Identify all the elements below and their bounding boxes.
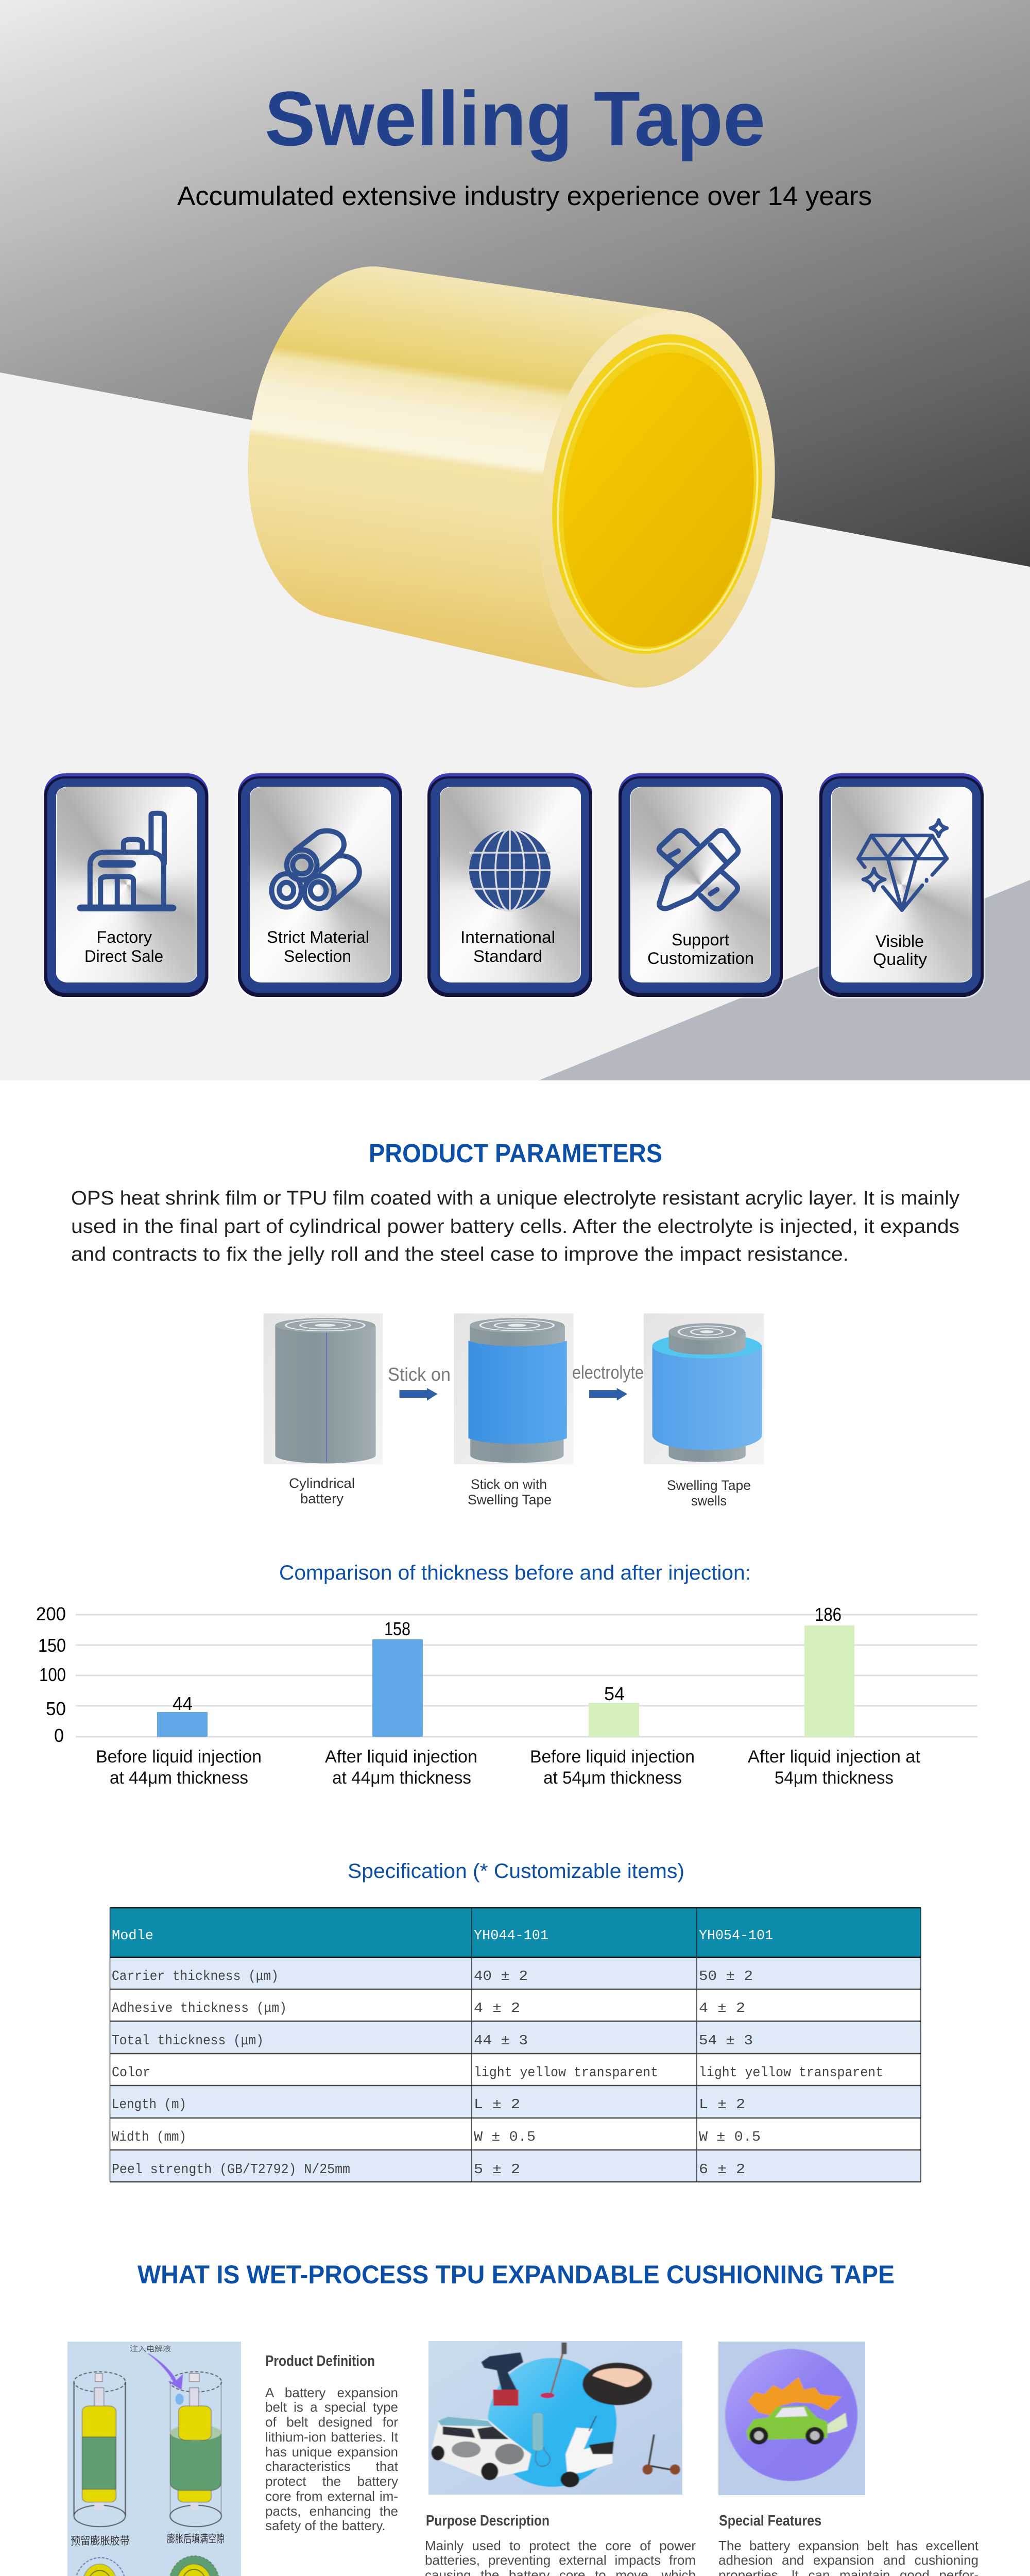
purple injection arrow xyxy=(148,2353,183,2390)
product description paragraph: and contracts to fix the jelly roll and the steel case to improve the impact resistance. xyxy=(71,1244,849,1265)
hero grey gradient wall xyxy=(0,0,1030,567)
caption: stick on with swelling tape xyxy=(468,1477,552,1507)
text block: special features xyxy=(718,2538,980,2576)
icon: kick scooter xyxy=(643,2434,680,2475)
feature card: factory direct sale xyxy=(43,773,210,998)
illustration: application scenes xyxy=(428,2341,682,2495)
icon: charger xyxy=(533,2413,550,2466)
water droplet xyxy=(176,2394,184,2404)
feature card: strict material selection xyxy=(237,773,404,998)
text block: purpose description: batteries, preventing external impacts from xyxy=(425,2552,696,2568)
specification table: YH054-101 xyxy=(699,1928,773,1944)
blue circle backdrop xyxy=(488,2358,616,2487)
battery image: swelling tape swells xyxy=(644,1313,764,1464)
specification table: Color xyxy=(112,2065,150,2081)
heading: special features: Special Features xyxy=(719,2513,821,2529)
x axis labels: at 54μm thickness xyxy=(543,1768,682,1788)
icon: stick vacuum xyxy=(540,2343,566,2398)
card label: Factory xyxy=(97,928,152,946)
specification table: 4 ± 2 xyxy=(474,2001,520,2016)
icon: robot vacuum xyxy=(582,2363,652,2405)
caption: swelling tape swells xyxy=(667,1478,751,1509)
hero light floor xyxy=(0,0,1030,1080)
bar: 44 before injection: 44 xyxy=(173,1693,193,1714)
specification table: 40 ± 2 xyxy=(474,1969,528,1985)
specification table: Length (m) xyxy=(112,2097,186,2113)
battery image: stick on with swelling tape xyxy=(454,1313,574,1464)
icon: diamond xyxy=(859,820,947,910)
icon: electric scooter xyxy=(560,2416,613,2487)
bar: 44 before injection xyxy=(157,1693,208,1737)
card label: Visible xyxy=(876,932,924,951)
feature card: international standard xyxy=(426,773,593,998)
bar: 186 after injection xyxy=(804,1604,854,1737)
left cell: before swelling xyxy=(74,2372,126,2527)
text block: product definition: belt is a special type xyxy=(265,2399,398,2415)
y axis labels: 200 xyxy=(36,1603,66,1624)
caption: cylindrical battery: battery xyxy=(300,1491,344,1506)
x axis labels: at 44μm thickness xyxy=(332,1768,471,1788)
text block: purpose description xyxy=(425,2538,697,2576)
bar: 158 after injection xyxy=(372,1618,423,1737)
feature card: visible quality xyxy=(818,773,985,998)
specification table: 6 ± 2 xyxy=(699,2162,745,2178)
y axis labels: 150 xyxy=(38,1635,66,1656)
product description paragraph xyxy=(71,1188,959,1265)
specification table: 44 ± 3 xyxy=(474,2033,528,2049)
specification table: Modle xyxy=(112,1928,153,1944)
specification table: Total thickness (μm) xyxy=(112,2033,264,2049)
caption: before swelling: 预留膨胀胶带 xyxy=(71,2535,130,2547)
text block: product definition xyxy=(265,2385,399,2540)
hero tape roll xyxy=(248,266,798,703)
arrow: electrolyte xyxy=(589,1388,627,1401)
y axis labels xyxy=(36,1603,66,1746)
icon: globe xyxy=(469,829,551,911)
card label: Standard xyxy=(473,947,542,965)
product description paragraph: OPS heat shrink film or TPU film coated with a unique electrolyte resistant acrylic layer. It is mainly xyxy=(71,1188,959,1209)
card label: Strict Material xyxy=(267,928,369,946)
icon: factory xyxy=(79,814,174,909)
text block: product definition: lithium-ion batteries. It xyxy=(265,2429,398,2445)
bar: 54 before injection xyxy=(589,1683,639,1737)
label: stick on: Stick on xyxy=(388,1364,451,1385)
x axis labels: 54μm thickness xyxy=(775,1768,894,1788)
x axis labels: at 44μm thickness xyxy=(110,1768,248,1788)
text block: product definition: pacts, enhancing the xyxy=(265,2503,398,2519)
text block: product definition: characteristics that xyxy=(265,2459,398,2474)
specification table: L ± 2 xyxy=(474,2097,520,2113)
y axis labels: 0 xyxy=(54,1725,64,1746)
flames xyxy=(748,2377,842,2416)
specification table: YH044-101 xyxy=(474,1928,548,1944)
bar chart: thickness comparison xyxy=(36,1603,977,1788)
caption: swelling tape swells: swells xyxy=(691,1493,727,1509)
bar: 54 before injection: 54 xyxy=(604,1683,625,1704)
card label: Support xyxy=(672,930,729,949)
card label: International xyxy=(460,928,555,946)
title: Swelling Tape xyxy=(265,75,765,162)
text block: product definition: core from external im- xyxy=(265,2488,398,2504)
table header row xyxy=(110,1908,921,1957)
right cell: after swelling xyxy=(170,2372,221,2527)
label: inject electrolyte: 注入电解液 xyxy=(130,2345,171,2353)
specification table: light yellow transparent xyxy=(699,2065,883,2081)
specification table: Adhesive thickness (μm) xyxy=(112,2001,287,2016)
icon: power drill xyxy=(482,2352,523,2406)
x axis labels: Before liquid injection xyxy=(530,1747,695,1767)
specification table: Carrier thickness (μm) xyxy=(112,1969,279,1985)
bar: 186 after injection: 186 xyxy=(815,1604,842,1625)
heading: product parameters: PRODUCT PARAMETERS xyxy=(369,1139,662,1168)
card label: Quality xyxy=(873,950,927,969)
green car xyxy=(746,2406,847,2445)
caption: after swelling: 膨胀后填满空隙 xyxy=(167,2533,225,2545)
illustration: battery cross-section xyxy=(67,2342,241,2576)
heading: product definition: Product Definition xyxy=(265,2353,375,2369)
x axis labels: Before liquid injection xyxy=(96,1747,262,1767)
specification table: Peel strength (GB/T2792) N/25mm xyxy=(112,2162,350,2178)
product description paragraph: used in the final part of cylindrical power battery cells. After the electrolyte is injected, it expands xyxy=(71,1216,959,1238)
label: electrolyte: electrolyte xyxy=(572,1362,644,1383)
icon: electric car xyxy=(432,2417,531,2480)
specification table: 54 ± 3 xyxy=(699,2033,753,2049)
specification table: 5 ± 2 xyxy=(474,2162,520,2178)
specification table: L ± 2 xyxy=(699,2097,745,2113)
arrow: stick on xyxy=(400,1388,437,1401)
hero corner triangle xyxy=(539,880,1030,1080)
text block: special features: adhesion and expansion and cushioning xyxy=(718,2552,978,2568)
specification table: Width (mm) xyxy=(112,2130,186,2145)
bar: 158 after injection: 158 xyxy=(384,1618,410,1639)
icon: pencil and ruler xyxy=(659,831,738,909)
battery image: cylindrical battery xyxy=(263,1313,383,1464)
specification table: W ± 0.5 xyxy=(699,2130,761,2145)
icon: rolls of material xyxy=(272,831,359,908)
specification table: 4 ± 2 xyxy=(699,2001,745,2016)
heading: thickness comparison: Comparison of thickness before and after injection: xyxy=(279,1562,751,1584)
section ring: after xyxy=(169,2556,219,2576)
x axis labels: After liquid injection at xyxy=(748,1747,921,1767)
caption: stick on with swelling tape: Stick on with xyxy=(471,1477,547,1492)
caption: stick on with swelling tape: Swelling Tape xyxy=(468,1492,552,1507)
card label: Customization xyxy=(647,949,754,968)
text block: product definition: safety of the battery. xyxy=(265,2518,386,2533)
text block: product definition: protect the battery xyxy=(265,2473,398,2489)
hero section xyxy=(0,0,1030,1080)
section ring: before xyxy=(75,2557,126,2576)
specification table: light yellow transparent xyxy=(474,2065,658,2081)
specification table: W ± 0.5 xyxy=(474,2130,536,2145)
card label: Direct Sale xyxy=(84,947,163,965)
caption: cylindrical battery: Cylindrical xyxy=(289,1476,355,1491)
heading: specification: Specification (* Customizable items) xyxy=(348,1860,684,1883)
y axis labels: 100 xyxy=(39,1664,66,1685)
x axis labels: After liquid injection xyxy=(325,1747,477,1767)
caption: swelling tape swells: Swelling Tape xyxy=(667,1478,751,1493)
heading: what is wet-process tape: WHAT IS WET-PROCESS TPU EXPANDABLE CUSHIONING TAPE xyxy=(138,2260,895,2289)
y axis labels: 50 xyxy=(46,1698,66,1719)
heading: purpose description: Purpose Description xyxy=(426,2513,550,2529)
illustration: burning car xyxy=(718,2342,865,2495)
text block: product definition: has unique expansion xyxy=(265,2444,398,2460)
battery process diagram xyxy=(263,1313,764,1509)
violet circle backdrop xyxy=(725,2349,857,2481)
card label: Selection xyxy=(284,947,351,965)
x axis labels xyxy=(96,1747,921,1788)
caption: cylindrical battery xyxy=(289,1476,355,1506)
feature card: support customization xyxy=(617,773,784,998)
specification table xyxy=(110,1908,921,2182)
text block: product definition: of belt designed for xyxy=(265,2414,398,2430)
subtitle: Accumulated extensive industry experience over 14 years xyxy=(177,181,872,211)
specification table: 50 ± 2 xyxy=(699,1969,753,1985)
